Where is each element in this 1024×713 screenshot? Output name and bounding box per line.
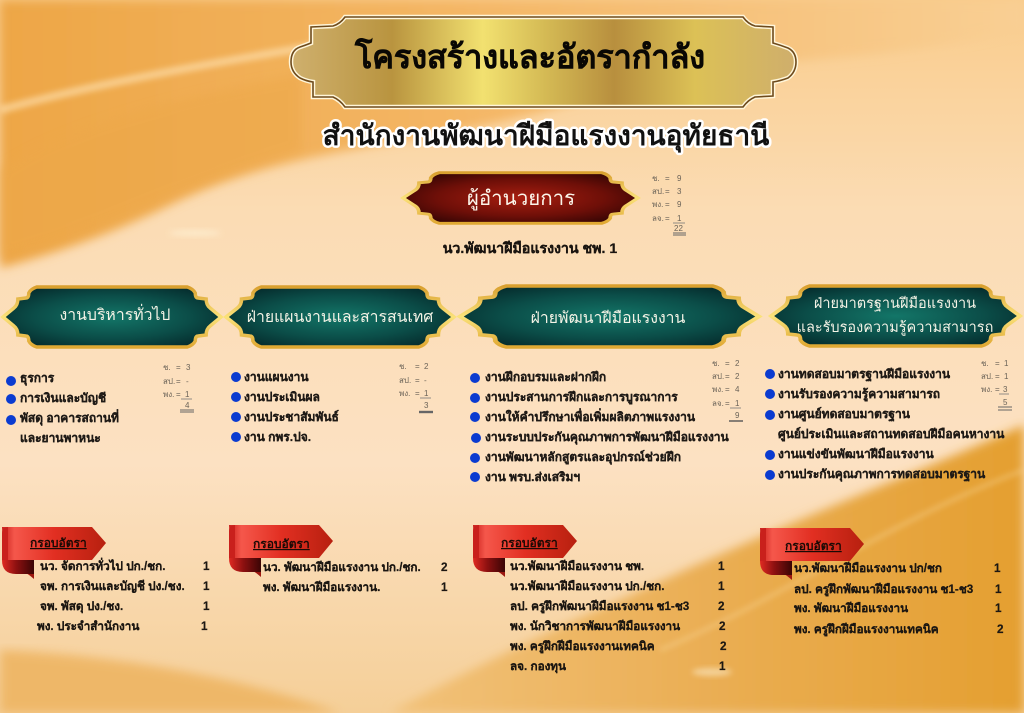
division 2 banner <box>226 287 454 347</box>
ribbon 2 <box>229 525 333 577</box>
division 1 staff counts: = <box>176 377 181 386</box>
division 3 staff counts: 2 <box>735 359 740 368</box>
division 4 task list: ศูนย์ประเมินและสถานทดสอบฝีมือคนหางาน <box>778 427 1005 442</box>
division 3 staff counts: = <box>725 399 730 408</box>
division 1 task list: ธุรการ <box>20 371 55 386</box>
division 3 task list: งานระบบประกันคุณภาพการพัฒนาฝีมือแรงงาน <box>485 430 730 445</box>
staffing table 4: 2 <box>997 623 1004 636</box>
staffing table 3: พง. นักวิชาการพัฒนาฝีมือแรงงาน <box>510 619 680 633</box>
staffing table 4: 1 <box>995 583 1002 596</box>
division 1 staff counts: 3 <box>186 363 191 372</box>
ribbon 2 label: กรอบอัตรา <box>253 537 310 551</box>
division 3 staff counts: 4 <box>735 385 740 394</box>
division 1 staff counts <box>163 363 194 412</box>
director staff counts: 22 <box>674 224 683 233</box>
director staff counts: = <box>665 187 670 196</box>
division 2 task list: งานประเมินผล <box>244 390 320 404</box>
division 4 staff counts: 3 <box>1003 385 1008 394</box>
staffing table 1: จพ. การเงินและบัญชี ปง./ชง. <box>40 580 185 593</box>
staffing table 4: 1 <box>995 602 1002 615</box>
staffing table 3: นว.พัฒนาฝีมือแรงงาน ชพ. <box>510 559 644 573</box>
division 1 task list: และยานพาหนะ <box>20 431 101 445</box>
division 4 task list: งานศูนย์ทดสอบมาตรฐาน <box>778 407 911 422</box>
division 2 staff counts: = <box>415 389 420 398</box>
division 3 heading: ฝ่ายพัฒนาฝีมือแรงงาน <box>531 309 686 327</box>
division 1 staff counts: สป. <box>163 377 175 386</box>
division 3 staff counts: ลจ. <box>712 399 724 408</box>
director staff counts: = <box>665 214 670 223</box>
staffing table 3 <box>510 559 727 674</box>
division 4 staff counts: 1 <box>1004 372 1009 381</box>
division 4 staff counts: = <box>995 359 1000 368</box>
division 4 banner <box>771 286 1020 346</box>
staffing table 2: นว. พัฒนาฝีมือแรงงาน ปก./ชก. <box>263 560 421 574</box>
division 2 task list: งาน กพร.ปจ. <box>244 430 311 444</box>
division 1 task list: พัสดุ อาคารสถานที่ <box>20 409 119 426</box>
director staff counts: = <box>665 200 670 209</box>
director staff counts: 9 <box>677 200 682 209</box>
staffing table 3: นว.พัฒนาฝีมือแรงงาน ปก./ชก. <box>510 579 664 593</box>
director banner <box>403 173 638 223</box>
division 2 heading: ฝ่ายแผนงานและสารสนเทศ <box>247 309 433 326</box>
division 2 staff counts: ช. <box>399 362 407 371</box>
division 2 staff counts: = <box>415 376 420 385</box>
division 2 staff counts: = <box>415 362 420 371</box>
director staff counts <box>652 174 686 235</box>
staffing table 4: นว.พัฒนาฝีมือแรงงาน ปก/ชก <box>794 561 942 575</box>
ribbon 3 label: กรอบอัตรา <box>501 536 558 550</box>
director staff counts: 3 <box>677 187 682 196</box>
division 3 staff counts: = <box>725 385 730 394</box>
division 4 task list: งานแข่งขันพัฒนาฝีมือแรงงาน <box>778 447 934 461</box>
division 4 staff counts: 5 <box>1003 398 1008 407</box>
ribbon 1 label: กรอบอัตรา <box>30 536 87 550</box>
division 1 staff counts: = <box>176 363 181 372</box>
staffing table 3: 1 <box>719 660 726 673</box>
division 3 staff counts: = <box>725 359 730 368</box>
director staff counts: 9 <box>677 174 682 183</box>
staffing table 3: 2 <box>719 620 726 633</box>
division 2 staff counts: 1 <box>424 389 429 398</box>
staffing table 1 <box>37 557 210 633</box>
division 3 staff counts: 1 <box>735 399 740 408</box>
staffing table 4: พง. พัฒนาฝีมือแรงงาน <box>794 601 908 615</box>
staffing table 1: 1 <box>203 560 210 573</box>
division 4 staff counts: สป. <box>981 372 993 381</box>
division 1 staff counts: = <box>176 390 181 399</box>
director staff counts: = <box>665 174 670 183</box>
division 1 banner <box>3 287 221 347</box>
division 4 heading: และรับรองความรู้ความสามารถ <box>797 319 993 336</box>
division 2 staff counts: สป. <box>399 376 411 385</box>
division 1 staff counts: 1 <box>185 390 190 399</box>
director staff counts: พง. <box>652 200 663 209</box>
staffing table 1: 1 <box>201 620 208 633</box>
division 4 staff counts: ช. <box>981 359 989 368</box>
division 1 task list <box>6 371 119 445</box>
division 4 task list: งานประกันคุณภาพการทดสอบมาตรฐาน <box>778 467 986 482</box>
division 3 staff counts: 9 <box>735 411 740 420</box>
division 2 staff counts: 2 <box>424 362 429 371</box>
division 4 heading <box>797 295 993 336</box>
division 2 staff counts: - <box>424 376 427 385</box>
division 4 heading: ฝ่ายมาตรฐานฝีมือแรงงาน <box>814 295 976 312</box>
division 1 staff counts: พง. <box>163 390 174 399</box>
staffing table 3: 1 <box>718 560 725 573</box>
division 1 task list: การเงินและบัญชี <box>20 391 106 405</box>
division 3 staff counts: = <box>725 372 730 381</box>
division 4 task list: งานทดสอบมาตรฐานฝีมือแรงงาน <box>778 367 951 382</box>
director staff counts: ช. <box>652 174 660 183</box>
staffing table 4 <box>794 561 1004 637</box>
division 3 staff counts: พง. <box>712 385 723 394</box>
division 4 staff counts: 1 <box>1004 359 1009 368</box>
staffing table 2: 2 <box>441 561 448 574</box>
division 1 heading: งานบริหารทั่วไป <box>60 303 170 324</box>
ribbon 3 <box>473 525 577 577</box>
division 3 task list: งานพัฒนาหลักสูตรและอุปกรณ์ช่วยฝึก <box>485 450 681 465</box>
staffing table 2 <box>263 560 448 594</box>
staffing table 3: ลป. ครูฝึกพัฒนาฝีมือแรงงาน ช1-ช3 <box>510 599 690 614</box>
staffing table 4: ลป. ครูฝึกพัฒนาฝีมือแรงงาน ช1-ช3 <box>794 582 974 597</box>
division 4 task list: งานรับรองความรู้ความสามารถ <box>778 387 940 402</box>
staffing table 1: พง. ประจำสำนักงาน <box>37 619 139 633</box>
division 2 task list: งานแผนงาน <box>244 370 309 384</box>
ribbon 4 <box>760 528 864 580</box>
subtitle: สำนักงานพัฒนาฝีมือแรงงานอุทัยธานี <box>323 120 769 153</box>
staffing table 1: จพ. พัสดุ ปง./ชง. <box>40 600 123 614</box>
staffing table 3: พง. ครูฝึกฝีมือแรงงานเทคนิค <box>510 639 655 654</box>
division 3 banner <box>460 286 759 347</box>
staffing table 3: 1 <box>718 580 725 593</box>
division 2 task list <box>231 370 339 444</box>
director position: นว.พัฒนาฝีมือแรงงาน ชพ. 1 <box>443 240 617 257</box>
division 3 staff counts: 2 <box>735 372 740 381</box>
director label: ผู้อำนวยการ <box>467 187 575 211</box>
staffing table 2: 1 <box>441 581 448 594</box>
division 2 staff counts <box>399 362 433 412</box>
director staff counts: สป. <box>652 187 664 196</box>
division 3 task list: งาน พรบ.ส่งเสริมฯ <box>485 470 580 484</box>
title text: โครงสร้างและอัตรากำลัง <box>354 37 705 75</box>
division 3 task list: งานประสานการฝึกและการบูรณาการ <box>485 390 678 405</box>
director staff counts: ลจ. <box>652 214 664 223</box>
division 4 staff counts: พง. <box>981 385 992 394</box>
division 3 task list: งานให้คำปรึกษาเพื่อเพิ่มผลิตภาพแรงงาน <box>485 408 696 424</box>
staffing table 2: พง. พัฒนาฝีมือแรงงาน. <box>263 580 380 594</box>
division 3 staff counts <box>712 359 743 421</box>
ribbon 4 label: กรอบอัตรา <box>785 539 842 553</box>
staffing table 3: ลจ. กองทุน <box>510 660 566 674</box>
division 4 staff counts: = <box>995 385 1000 394</box>
division 2 staff counts: 3 <box>424 401 429 410</box>
staffing table 3: 2 <box>718 600 725 613</box>
division 4 task list <box>765 367 1005 482</box>
division 2 task list: งานประชาสัมพันธ์ <box>244 410 339 424</box>
division 3 staff counts: ช. <box>712 359 720 368</box>
title plaque <box>291 17 796 107</box>
division 1 staff counts: - <box>186 377 189 386</box>
staffing table 1: นว. จัดการทั่วไป ปก./ชก. <box>40 557 165 573</box>
staffing table 1: 1 <box>203 600 210 613</box>
staffing table 4: 1 <box>994 562 1001 575</box>
division 3 staff counts: สป. <box>712 372 724 381</box>
division 3 task list: งานฝึกอบรมและฝากฝึก <box>485 370 606 384</box>
staffing table 4: พง. ครูฝึกฝีมือแรงงานเทคนิค <box>794 622 939 637</box>
division 1 staff counts: ช. <box>163 363 171 372</box>
staffing table 1: 1 <box>203 580 210 593</box>
division 1 staff counts: 4 <box>185 401 190 410</box>
division 4 staff counts <box>981 359 1012 410</box>
staffing table 3: 2 <box>720 640 727 653</box>
division 4 staff counts: = <box>995 372 1000 381</box>
director staff counts: 1 <box>677 214 682 223</box>
ribbon 1 <box>2 527 106 579</box>
division 3 task list <box>470 370 730 484</box>
division 2 staff counts: พง. <box>399 389 410 398</box>
